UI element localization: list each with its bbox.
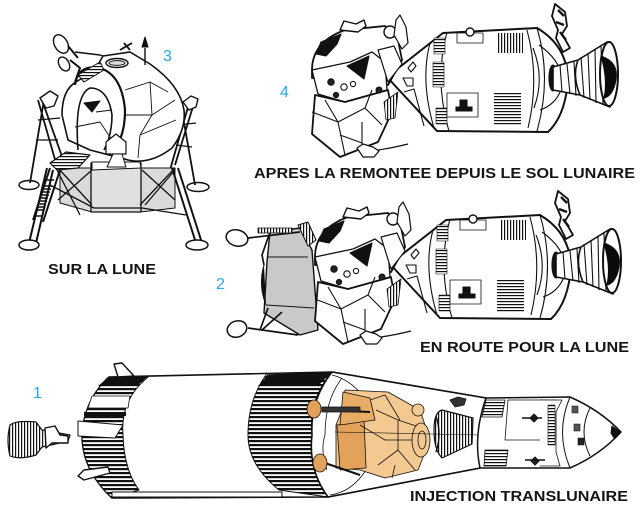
caption: apres la remontee: APRES LA REMONTEE DEPUIS LE SOL LUNAIRE <box>254 166 635 182</box>
rear legs and pads <box>19 100 209 192</box>
front legs and pads <box>19 168 208 250</box>
number 1: 1 <box>33 385 42 402</box>
fins and thruster housings <box>114 363 134 377</box>
adapter interior <box>311 372 486 497</box>
CSM <box>478 397 621 468</box>
forward band stripes <box>248 372 332 497</box>
ascent stage <box>62 52 184 167</box>
drawing: complete LM docked to CSM <box>224 191 621 344</box>
number 2: 2 <box>216 276 225 293</box>
aft skirt stripes <box>82 377 148 498</box>
engine nozzle <box>8 421 70 458</box>
antennas <box>50 32 148 82</box>
lunar module in orange <box>307 390 430 478</box>
left side strut group and quad thrusters <box>40 91 198 110</box>
caption: injection translunaire: INJECTION TRANSLUNAIRE <box>410 489 628 505</box>
drawing: Saturn S-IVB stage with CSM and LM in adapter <box>8 363 621 498</box>
ladder <box>33 168 60 222</box>
number 4: 4 <box>280 84 289 101</box>
SM engine bell <box>434 410 473 458</box>
S-IVB hull <box>82 372 486 498</box>
caption: sur la lune: SUR LA LUNE <box>48 262 156 278</box>
drawing: lunar module on the Moon <box>19 32 209 250</box>
number 3: 3 <box>163 48 172 65</box>
drawing: CSM and LM ascent stage after lift-off <box>312 4 618 157</box>
descent stage <box>58 162 175 212</box>
porch <box>50 152 90 170</box>
descent stage <box>264 228 318 335</box>
caption: en route: EN ROUTE POUR LA LUNE <box>420 340 629 356</box>
landing gear <box>248 232 300 335</box>
